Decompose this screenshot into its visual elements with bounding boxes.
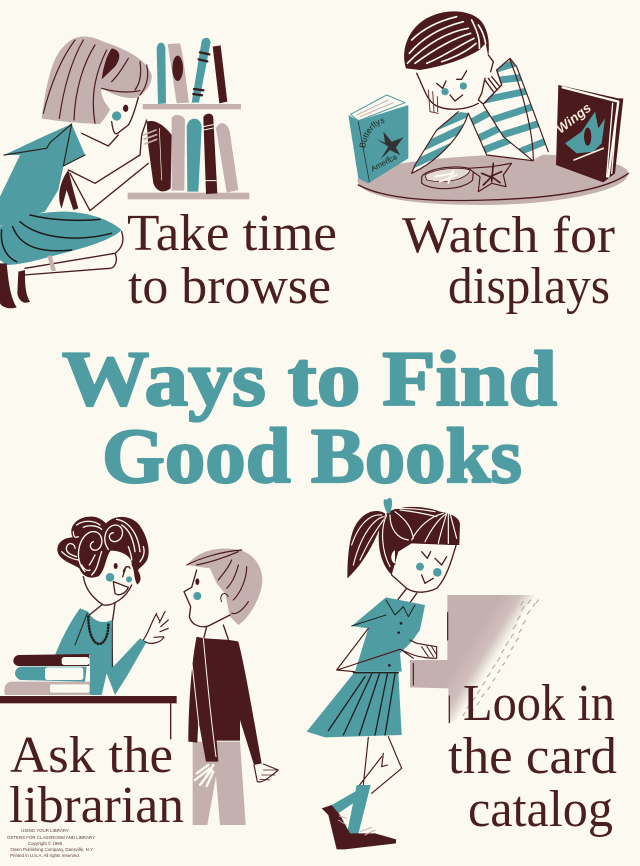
caption: take time to browse: to browse bbox=[128, 258, 331, 315]
caption: watch for displays bbox=[402, 207, 615, 315]
face bbox=[391, 543, 457, 605]
bookshelf with books bbox=[128, 38, 249, 199]
book: butterflys of america: America bbox=[369, 152, 399, 173]
imprint text: Copyright © 1965 bbox=[28, 841, 63, 846]
sweater bbox=[408, 58, 557, 173]
card catalog cabinet bbox=[410, 595, 539, 723]
librarian head bbox=[83, 563, 132, 620]
imprint text: USING YOUR LIBRARY bbox=[21, 828, 69, 833]
title: Ways to Find bbox=[62, 335, 557, 422]
face and arms bbox=[68, 97, 157, 211]
imprint text: OSTERS FOR CLASSROOM AND LIBRARY bbox=[7, 835, 95, 840]
head and face bbox=[417, 55, 502, 113]
caption: ask the librarian bbox=[9, 727, 184, 834]
arm and hand bbox=[337, 628, 437, 672]
stack of books bbox=[4, 654, 90, 695]
illustration: boy watching displays bbox=[348, 11, 629, 205]
imprint text: Printed in U.S.A. All rights reserved. bbox=[10, 853, 80, 858]
book: butterflys of america bbox=[348, 94, 408, 184]
ponytail behind bbox=[59, 170, 78, 210]
legs and shoes bbox=[0, 232, 123, 308]
caption: look in the card catalog: Look in bbox=[463, 675, 615, 732]
caption: look in the card catalog bbox=[448, 675, 617, 838]
hair bbox=[42, 36, 152, 124]
blouse bbox=[352, 597, 425, 672]
caption: watch for displays: Watch for bbox=[402, 207, 615, 264]
caption: ask the librarian: Ask the bbox=[10, 727, 173, 784]
necklace bbox=[88, 617, 108, 644]
ponytail and hair bbox=[347, 498, 460, 578]
illustration: girl at card catalog bbox=[307, 498, 539, 849]
imprint text bbox=[7, 828, 95, 858]
curly hair bbox=[57, 517, 149, 585]
illustration: librarian and boy bbox=[0, 517, 278, 825]
title bbox=[62, 335, 557, 499]
skirt bbox=[0, 212, 122, 265]
legs bbox=[358, 737, 402, 793]
blouse bbox=[0, 124, 85, 226]
specimen dish and butterfly bbox=[422, 163, 512, 192]
table bbox=[357, 154, 628, 205]
title: Good Books bbox=[102, 412, 522, 499]
book: wings bbox=[553, 85, 623, 182]
caption: take time to browse bbox=[127, 205, 337, 315]
librarian hand bbox=[143, 612, 168, 643]
librarian torso bbox=[55, 608, 147, 695]
book: butterflys of america: of bbox=[384, 155, 391, 162]
caption: look in the card catalog: catalog bbox=[468, 781, 613, 838]
desk bbox=[0, 696, 177, 739]
book: wings: Wings bbox=[553, 100, 594, 136]
hair bbox=[404, 11, 489, 70]
caption: ask the librarian: librarian bbox=[9, 777, 184, 834]
caption: look in the card catalog: the card bbox=[448, 728, 617, 785]
caption: take time to browse: Take time bbox=[127, 205, 337, 262]
skirt bbox=[307, 672, 402, 737]
book: butterflys of america: Butterflys bbox=[359, 118, 384, 148]
boy bbox=[184, 549, 278, 825]
caption: watch for displays: displays bbox=[448, 258, 610, 315]
imprint text: Owen Publishing Company, Dansville, N.Y. bbox=[10, 847, 94, 852]
socks and shoes bbox=[322, 785, 396, 849]
illustration: girl browsing bookshelf bbox=[0, 36, 249, 308]
